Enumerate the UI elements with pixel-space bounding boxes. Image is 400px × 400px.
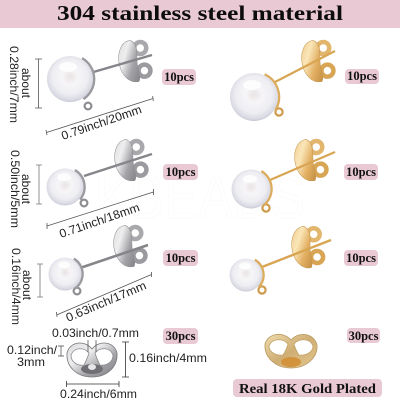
dimension: row 3 height [9, 248, 43, 325]
quantity label silver row 2: 10pcs [166, 165, 196, 179]
dimension: back height: 0.16inch/4mm [129, 351, 207, 365]
quantity label gold row 1: 10pcs [347, 69, 377, 83]
quantity label gold backs: 30pcs [349, 329, 379, 343]
dimension: back height [122, 342, 207, 377]
dimension: back post width [52, 326, 139, 352]
dimension: row 2 height: 0.50inch/5mm [8, 150, 22, 228]
dimension: row 1 height: about [19, 68, 33, 99]
dimension: row 2 height: about [19, 174, 33, 205]
quantity label gold row 3: 10pcs [346, 251, 376, 265]
quantity label silver row 3: 10pcs [166, 251, 196, 265]
dimension: row 3 height: about [20, 270, 34, 301]
gold ear back [265, 334, 317, 368]
dimension: back hole: 0.12inch/ [7, 343, 58, 357]
quantity label silver backs: 30pcs [166, 329, 196, 343]
title: 304 stainless steel material [57, 1, 343, 25]
dimension: row 3 height: 0.16inch/4mm [9, 248, 23, 325]
gold earring medium [232, 137, 335, 212]
dimension: row 2 length: 0.71inch/18mm [57, 200, 141, 241]
gold earring small [230, 225, 331, 294]
dimension: row 1 length [46, 96, 153, 143]
silver earring small [48, 223, 148, 294]
header band [0, 0, 400, 28]
silver ear back [67, 343, 117, 377]
dimension: back width [60, 381, 137, 400]
dimension: back post width: 0.03inch/0.7mm [52, 326, 139, 340]
dimension: back hole: 3mm [17, 355, 45, 369]
watermark: KBEADS [95, 163, 305, 232]
plating label: Real 18K Gold Plated [239, 382, 376, 397]
dimension: back hole [7, 343, 64, 369]
dimension: row 3 length: 0.63inch/17mm [64, 278, 148, 325]
dimension: row 1 height [7, 46, 42, 123]
silver earring large [47, 38, 152, 109]
silver earring medium [46, 137, 152, 206]
dimension: row 1 height: 0.28inch/7mm [7, 46, 21, 123]
quantity label silver row 1: 10pcs [164, 70, 194, 84]
gold earring large [230, 38, 335, 121]
dimension: row 2 length [47, 189, 154, 241]
quantity label gold row 2: 10pcs [346, 165, 376, 179]
dimension: row 2 height [8, 150, 42, 228]
dimension: row 1 length: 0.79inch/20mm [59, 102, 143, 143]
